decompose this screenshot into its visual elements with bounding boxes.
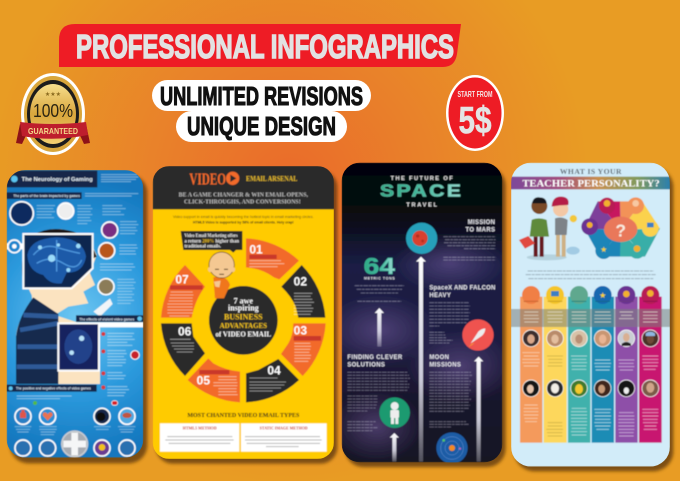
wedge 03 bbox=[281, 323, 326, 376]
intro text bbox=[526, 271, 656, 279]
heading: email types: MOST CHANTED VIDEO EMAIL TYPES bbox=[187, 413, 300, 419]
icon: game controller bbox=[61, 430, 88, 458]
text: finding clever solutions: SOLUTIONS bbox=[347, 362, 385, 368]
center circle: BUSINESS bbox=[224, 313, 263, 322]
column: wizard: ★ bbox=[599, 291, 606, 300]
header: BE A GAME CHANGER & WIN EMAIL OPENS, bbox=[179, 192, 308, 199]
wedge 07: 07 bbox=[175, 272, 189, 286]
title: TRAVEL bbox=[406, 202, 438, 208]
title: WHAT IS YOUR bbox=[560, 167, 622, 176]
title banner: PROFESSIONAL INFOGRAPHICS bbox=[76, 28, 454, 65]
brain scan bbox=[58, 322, 143, 371]
badge: 100% guaranteed: GUARANTEED bbox=[28, 126, 78, 136]
column: friend bbox=[544, 286, 567, 443]
icon: rocket bbox=[462, 319, 494, 351]
center circle: of VIDEO EMAIL bbox=[215, 331, 272, 339]
icon: mars bbox=[406, 223, 437, 254]
badge: 100% guaranteed: 100% bbox=[33, 101, 73, 121]
stat: 64 metric tons: METRIC TONS bbox=[364, 277, 395, 281]
panel: future of space travel bbox=[342, 162, 508, 470]
section bar: brain parts: The parts of the brain impacted by games bbox=[13, 194, 80, 198]
section bar: brain parts bbox=[7, 192, 82, 199]
traits band bbox=[511, 309, 670, 327]
intro text bbox=[173, 215, 314, 225]
title bbox=[380, 176, 463, 208]
chart: personality wheel: ★ bbox=[600, 245, 607, 254]
head and boy illustration bbox=[16, 229, 113, 384]
center circle bbox=[209, 286, 278, 355]
icon: monk mascot bbox=[208, 252, 235, 298]
column: framer bbox=[520, 286, 542, 443]
wedge 02 bbox=[281, 265, 325, 318]
header: EMAIL ARSENAL bbox=[246, 175, 298, 183]
header bbox=[153, 166, 334, 209]
wedge 01: 01 bbox=[249, 242, 263, 256]
icon: astronaut bbox=[379, 397, 410, 428]
card: html5 method bbox=[160, 423, 239, 452]
card: static image method bbox=[241, 423, 327, 452]
title banner bbox=[59, 24, 461, 67]
speech bubble: traditional emails. bbox=[184, 245, 221, 250]
wedge 04: 04 bbox=[267, 364, 281, 378]
header: VIDEO bbox=[189, 169, 226, 188]
header: CLICK-THROUGHS, AND CONVERSIONS! bbox=[184, 199, 301, 206]
column: wizard bbox=[592, 286, 614, 443]
wedge 01 bbox=[246, 238, 299, 279]
wedge 06 bbox=[161, 323, 205, 376]
text: spacex and falcon heavy: HEAVY bbox=[429, 293, 451, 299]
wedge 04 bbox=[246, 359, 299, 402]
panel: video email arsenal bbox=[153, 166, 337, 464]
icons: brain part circles bbox=[10, 202, 118, 295]
text: moon missions bbox=[429, 355, 472, 427]
price badge: START FROM bbox=[458, 89, 492, 99]
wedge 06: 06 bbox=[178, 324, 192, 338]
speech bubble: Video Email Marketing offers bbox=[184, 234, 238, 239]
center circle: 7 awe bbox=[234, 297, 253, 306]
text: mission to mars: MISSION bbox=[468, 220, 495, 226]
brain view bbox=[23, 234, 93, 288]
text: finding clever solutions bbox=[347, 355, 410, 431]
wedge 05 bbox=[188, 358, 240, 402]
icon: target connector bbox=[7, 240, 23, 253]
badge: 100% guaranteed bbox=[16, 73, 90, 155]
panel: teacher personality bbox=[511, 163, 673, 471]
section bar: violent games bbox=[76, 315, 143, 322]
text: moon missions: MISSIONS bbox=[429, 362, 461, 368]
text: finding clever solutions: FINDING CLEVER bbox=[347, 355, 403, 361]
wedge 03: 03 bbox=[294, 324, 307, 338]
illustration: teachers bbox=[519, 197, 580, 260]
text: spacex and falcon heavy: SpaceX AND FALCON bbox=[429, 286, 495, 292]
wedge 05: 05 bbox=[197, 374, 210, 388]
title: SPACE bbox=[380, 181, 463, 201]
section bar: violent games: The effects of violent video games bbox=[79, 317, 134, 321]
icons: positive and negative effects bbox=[15, 401, 135, 456]
speech bubble: a return 280% higher than bbox=[184, 239, 239, 244]
text: spacex and falcon heavy bbox=[429, 286, 495, 343]
heading: The Neurology of Gaming bbox=[22, 177, 93, 183]
text: mission to mars: TO MARS bbox=[466, 227, 495, 233]
pill: unique design: UNIQUE DESIGN bbox=[187, 111, 336, 141]
icon: solar system bbox=[436, 432, 468, 464]
chart: personality wheel bbox=[581, 197, 660, 259]
intro text: HTML5 Video is supported by 58% of email clients. Holy crap! bbox=[193, 221, 294, 225]
wedge 02: 02 bbox=[294, 274, 307, 288]
text: moon missions: MOON bbox=[429, 355, 449, 361]
price badge bbox=[446, 75, 504, 151]
pill: unlimited revisions: UNLIMITED REVISIONS bbox=[160, 81, 363, 111]
panel: neurology of gaming bbox=[7, 170, 147, 463]
price badge: 5$ bbox=[458, 100, 492, 142]
center circle: ADVANTAGES bbox=[220, 322, 267, 330]
wedge 07 bbox=[161, 265, 205, 318]
effects list bbox=[101, 332, 139, 396]
title bbox=[511, 167, 670, 190]
column: nurturer bbox=[568, 286, 590, 443]
center circle: inspiring bbox=[228, 304, 259, 313]
pill: unlimited revisions bbox=[152, 80, 371, 111]
heading bbox=[7, 171, 97, 187]
column: inspirer bbox=[639, 286, 662, 443]
chart: personality wheel: ? bbox=[615, 220, 626, 240]
intro text: Video support in email is quickly becoming the hottest topic in email marketing circles. bbox=[173, 215, 314, 219]
card: html5 method: HTML5 METHOD bbox=[183, 426, 217, 431]
column: ideal bbox=[615, 286, 638, 443]
arrows bbox=[375, 257, 483, 462]
stat: 64 metric tons: 64 bbox=[364, 253, 395, 279]
title: TEACHER PERSONALITY? bbox=[522, 180, 660, 190]
text: mission to mars bbox=[443, 220, 496, 260]
stat: 64 metric tons bbox=[355, 253, 404, 301]
speech bubble bbox=[181, 231, 242, 253]
section bar: positive and negative bbox=[7, 385, 97, 392]
section bar: positive and negative: The positive and negative effects of video games bbox=[16, 387, 91, 391]
title: THE FUTURE OF bbox=[391, 176, 453, 182]
badge: 100% guaranteed: ★★★ bbox=[45, 91, 61, 98]
card: static image method: STATIC IMAGE METHOD bbox=[260, 426, 308, 431]
